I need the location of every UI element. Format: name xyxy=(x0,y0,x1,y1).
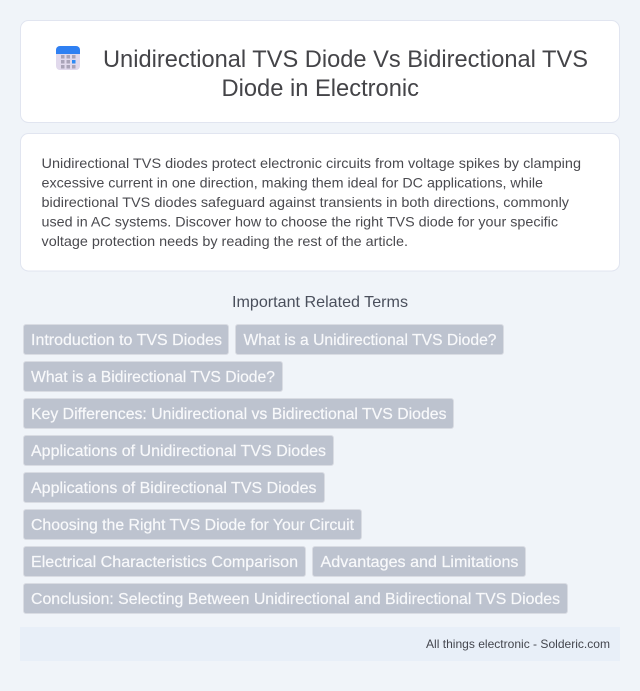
panel: related term chips xyxy=(24,324,568,614)
chip: bidirectional: What is a Bidirectional TVS Diode? xyxy=(31,369,275,386)
title: Diode in Electronic xyxy=(222,75,419,102)
chip: applications bidirectional: Applications of Bidirectional TVS Diodes xyxy=(31,480,316,497)
chip: applications bidirectional xyxy=(24,472,324,502)
chip: applications unidirectional xyxy=(24,436,334,466)
chip: introduction xyxy=(24,324,228,354)
chip: unidirectional xyxy=(236,324,504,354)
footer text: All things electronic - Solderic.com xyxy=(426,637,610,651)
chip: bidirectional xyxy=(24,362,282,392)
heading: important related terms: Important Related Terms xyxy=(232,294,408,311)
chip: electrical characteristics xyxy=(24,546,306,576)
text block: description: Unidirectional TVS diodes protect electronic circuits from voltage spikes by clamping xyxy=(42,155,581,171)
footer xyxy=(20,627,620,661)
chip: choosing: Choosing the Right TVS Diode for Your Circuit xyxy=(31,517,355,534)
panel: description card xyxy=(20,134,620,271)
chip: advantages: Advantages and Limitations xyxy=(320,554,518,571)
panel: header card xyxy=(20,20,620,122)
chip: applications unidirectional: Applications of Unidirectional TVS Diodes xyxy=(31,443,326,460)
chip: key differences xyxy=(24,398,454,428)
title: Unidirectional TVS Diode Vs Bidirectional TVS xyxy=(103,46,588,73)
chip: electrical characteristics: Electrical Characteristics Comparison xyxy=(31,554,298,571)
chip: advantages xyxy=(312,546,526,576)
text block: description: excessive current in one direction, making them ideal for DC applications, while xyxy=(42,174,543,190)
chip: conclusion: Conclusion: Selecting Between Unidirectional and Bidirectional TVS Diodes xyxy=(31,591,560,608)
chip: key differences: Key Differences: Unidirectional vs Bidirectional TVS Diodes xyxy=(31,406,446,423)
title xyxy=(103,46,588,102)
icon: calendar xyxy=(56,46,80,70)
text block: description: voltage protection needs by reading the rest of the article. xyxy=(42,233,408,249)
chip: conclusion xyxy=(24,584,568,614)
chip: unidirectional: What is a Unidirectional TVS Diode? xyxy=(244,332,497,349)
chip: choosing xyxy=(24,510,362,540)
chip: introduction: Introduction to TVS Diodes xyxy=(31,332,222,349)
text block: description: used in AC systems. Discover how to choose the right TVS diode for your specific xyxy=(42,214,558,230)
text block: description: bidirectional TVS diodes safeguard against transients in both directions, commonly xyxy=(42,194,569,210)
text block: description xyxy=(42,155,581,249)
